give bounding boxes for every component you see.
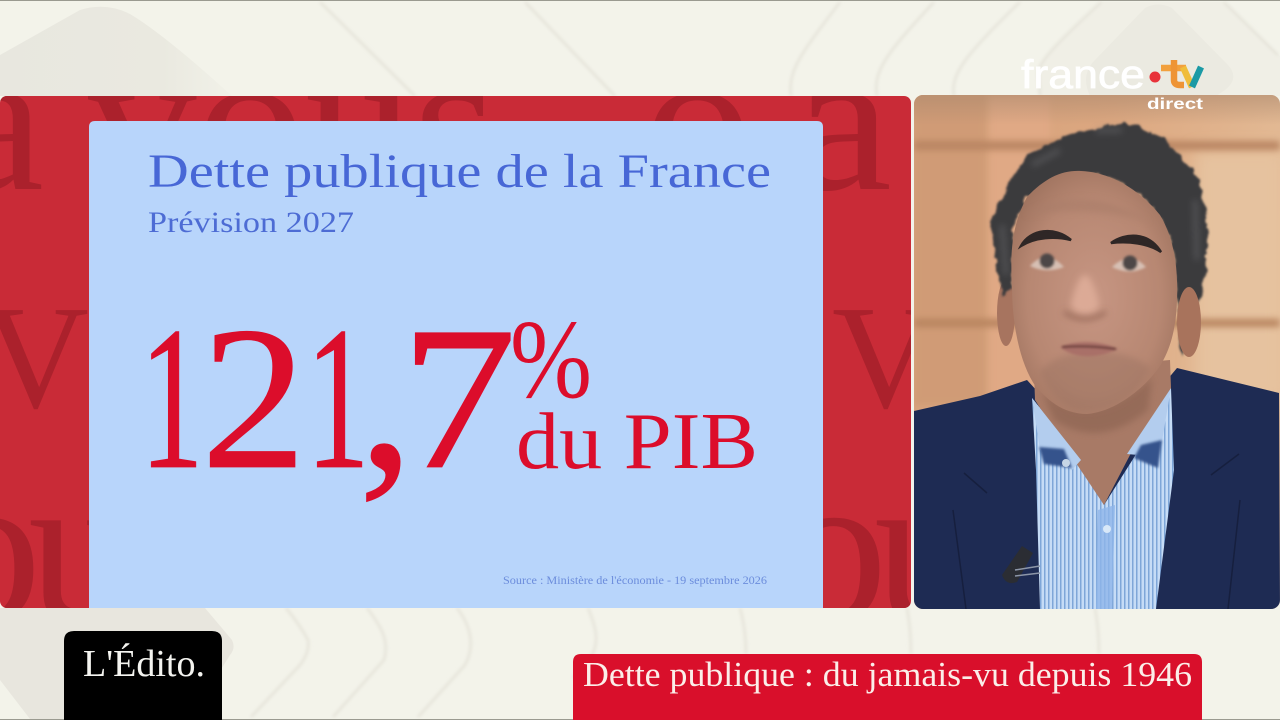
ghost letters (0, 96, 911, 608)
ghost letters: o (780, 427, 888, 666)
stubble shading (1043, 353, 1146, 409)
under collar right (1134, 440, 1162, 468)
hair (991, 123, 1209, 357)
big number (140, 266, 517, 516)
face (1011, 171, 1177, 414)
eyebrow right (1111, 236, 1161, 252)
source: Source : Ministère de l'économie - 19 septembre 2026 (503, 575, 767, 587)
nose (1064, 275, 1106, 319)
big number: 2 (201, 286, 307, 512)
left ear (997, 280, 1015, 346)
lapel line right (1211, 454, 1240, 609)
eyebrow left (1021, 231, 1071, 246)
studio wall (914, 95, 1280, 609)
subheading: Prévision 2027 (148, 206, 354, 239)
eye left (1030, 254, 1064, 270)
ghost letters: V (832, 276, 939, 440)
ghost letters: u (874, 427, 982, 666)
panel: blue card (89, 121, 823, 608)
badge: L'Édito (64, 631, 222, 720)
collar right (1127, 388, 1171, 455)
under collar left (1039, 447, 1072, 468)
banner: headline: Dette publique : du jamais-vu depuis 1946 (583, 655, 1192, 694)
logo subtitle: direct (1147, 96, 1203, 113)
eye right (1112, 256, 1146, 272)
shirt placket (1096, 505, 1115, 609)
right ear (1177, 287, 1201, 357)
big number: 7 (400, 284, 517, 512)
banner: headline (573, 654, 1202, 720)
logo: france tv direct (1021, 53, 1203, 113)
lapel line left (953, 473, 987, 609)
forehead shading (1072, 204, 1111, 210)
logo word: france (1021, 53, 1145, 97)
lapel microphone (1002, 546, 1040, 583)
neck shadow (1046, 382, 1151, 434)
logo dot (1150, 72, 1160, 82)
shirt (1032, 388, 1174, 609)
ghost letters: a (792, 7, 892, 234)
big number: 1 (306, 284, 370, 511)
ghost letters: o (644, 7, 752, 234)
ghost letters: vous (88, 7, 498, 234)
collar button (1062, 459, 1070, 467)
panel: red slide background with ghost letters (0, 96, 911, 608)
du PIB label: du PIB (516, 398, 758, 486)
heading: Dette publique de la France (148, 145, 771, 198)
percent sign: % (510, 298, 592, 422)
big number: , (358, 266, 414, 516)
logo tv (1161, 60, 1201, 87)
neck (1034, 360, 1171, 505)
collar left (1032, 398, 1081, 470)
big number: 1 (140, 284, 204, 511)
mouth (1060, 342, 1118, 356)
ghost letters: u (28, 427, 136, 666)
shirt button (1103, 525, 1111, 533)
badge: L'Édito: L'Édito. (83, 643, 205, 685)
panel: presenter photo (914, 95, 1280, 609)
hair highlights (1002, 130, 1197, 275)
jacket (914, 368, 1280, 609)
